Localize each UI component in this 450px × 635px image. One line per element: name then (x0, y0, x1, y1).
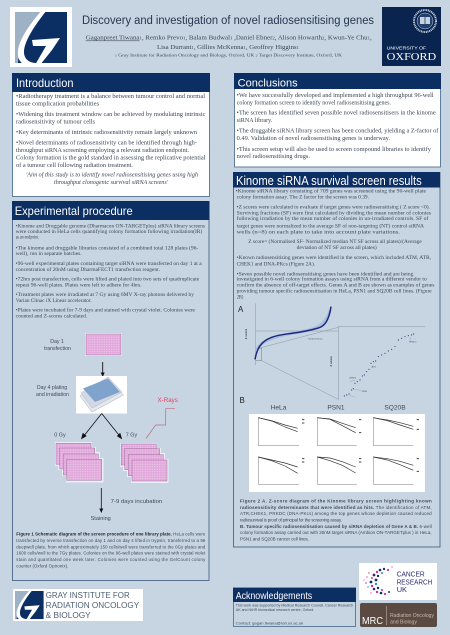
label: 7 Gy: 7 Gy (126, 433, 137, 439)
text: kinome bullets: following irradiation by the mean number of colonies in un-irradiated controls. SF of (237, 215, 429, 222)
logo: Gray Institute banner (13, 589, 143, 621)
logo: MRC Radiation Oncology and Biology: MRC (362, 616, 383, 627)
arrow: incubation (99, 488, 103, 513)
label: 0 Gy: 0 Gy (54, 433, 66, 439)
icon: dotted C (363, 566, 393, 595)
chart: Z-score curve with inset: PRKDC (409, 342, 417, 344)
label: staining: Staining (91, 516, 111, 522)
icon: plate in white box (76, 376, 127, 414)
label: PSN1: PSN1 (327, 404, 345, 412)
heading: experimental procedure: Experimental procedure (15, 204, 133, 218)
plates: 7 Gy stack (120, 443, 168, 483)
authors: Gaganpreet Tiwana 1, Remko Prevo 1, Balam Budwal 1 ,Daniel Ebner 2, Alison Howarth 2, Kwun-Ye Chu 1, (86, 36, 372, 42)
text: kinome bullets: confirm the absence of off-target effects. Genes A and B are shown as examples of genes (237, 282, 434, 289)
text: kinome bullets: Z score= (Normalised SF- Normalized median NT SF across all plates)/(Average (248, 238, 422, 245)
logo: Gray Institute banner: RADIATION ONCOLOGY (46, 601, 140, 610)
text: kinome bullets: •Seven possible novel radiosensitising genes have been identified and are being (237, 270, 414, 277)
label: day 4 plating and irradiation: and irradiation (36, 392, 69, 398)
figure 1 caption: 1600 cells/well to the 7Gy plates. Colonies on the 96-well plates were stained with crystal violet (16, 551, 206, 556)
text: funding and contact: Contact: gagan.tiwana@rob.ox.ac.uk (236, 620, 303, 626)
text: procedure bullets: well), run in separate batches. (16, 250, 82, 257)
logo: Cancer Research UK: CANCER (397, 570, 425, 579)
chart: Z-score curve with inset (244, 303, 425, 400)
text: procedure bullets: were conducted in HeLa cells quantifying colony formation following irradiation(IR) (16, 228, 202, 235)
heading: introduction: Introduction (16, 76, 74, 90)
label: day 4 plating and irradiation (36, 385, 69, 398)
text: introduction bullets: throughput siRNA screening employing a relevant radiation endpoint. (16, 147, 189, 154)
text: introduction bullets: of a tumour cell following radiation treatment. (16, 162, 133, 169)
text: procedure bullets: concentration of 20nM using DharmaFECT1 transfection reagent. (16, 266, 160, 273)
text: conclusions bullets: •This screen setup will also be used to screen compound libraries to identify (237, 146, 431, 153)
text: kinome bullets: •Known radiosensitising genes were identified in the screen, which included ATM, ATR, (237, 254, 431, 261)
logo: University of Oxford (382, 7, 441, 66)
text: kinome bullets: deviation of NT SF across all plates) (297, 244, 377, 251)
logo: University of Oxford: UNIVERSITY OF (387, 46, 427, 50)
text: kinome bullets (236, 187, 434, 300)
text: introduction bullets (16, 93, 206, 186)
text: kinome bullets: Surviving fractions (SF) were first calculated by dividing the mean number of colonies (237, 209, 431, 216)
text: procedure bullets (16, 222, 205, 320)
panel: conclusions (234, 73, 441, 167)
text: introduction bullets: radiosensitivity of tumour cells (16, 119, 95, 126)
chart: SQ20B gene B (373, 457, 419, 484)
text: conclusions bullets: siRNA library. (237, 118, 273, 124)
figure 2 caption: colony formation assay carried out with 20nM target siRNA (Ambion ON-TARGETplus ) in HeLa, (240, 530, 432, 535)
text: procedure bullets: •72hrs post transfection, cells were lifted and plated into two sets of quadruplicate (16, 276, 200, 283)
chart: Z-score curve with inset: Z score (329, 356, 333, 367)
logo: Gray Institute banner: & BIOLOGY (46, 611, 91, 620)
text: kinome bullets: target genes were normalized to the average SF of non-targeting (NT) control siRNA (237, 222, 424, 229)
label: SQ20B: SQ20B (384, 404, 406, 412)
heading: conclusions: Conclusions (238, 77, 298, 89)
figure 2 caption: radiosensitivity determinants that were identified as hits. The identification of ATM, (240, 505, 432, 510)
icon: x-ray zigzag (146, 409, 175, 438)
text: procedure bullets: as an endpoint. (16, 235, 39, 241)
figure 2 caption: radiosurvival is proof of principal for the screening assay. (240, 517, 342, 522)
text: kinome bullets: investigated in 6-well colony formation assays using siRNA from a different vendor to (237, 276, 427, 283)
figure 1 caption: counter (Oxford Optronix). (16, 563, 68, 568)
title: Discovery and investigation of novel radiosensitising genes (82, 15, 374, 27)
logo: Gray Institute banner: GRAY INSTITUTE FOR (46, 591, 130, 600)
figure 2 caption: Figure 2 A. Z-score diagram of the Kinome library screen highlighting known (240, 498, 432, 503)
chart: PSN1 gene A (317, 417, 361, 446)
chart: Z-score curve with inset: CHEK1 (349, 378, 357, 380)
label: HeLa: HeLa (271, 404, 287, 412)
text: funding and contact (236, 602, 353, 626)
heading: kinome results: Kinome siRNA survival screen results (236, 173, 422, 188)
text: procedure bullets: counted and Z-scores calculated. (16, 314, 87, 320)
arrows: split to 0 Gy and 7 Gy (82, 414, 122, 438)
figure 2 caption: B. Tumour specific radiosensitisation caused by siRNA depletion of Gene A & B. 6-well (240, 524, 432, 529)
label: day 4 plating and irradiation: Day 4 plating (37, 385, 67, 391)
label: day 1 transfection: Day 1 (50, 339, 64, 345)
figure 2 caption: PSN1 and SQ20B cancer cell lines. (240, 536, 309, 541)
text: funding and contact: This work was supported by Medical Research Council, Cancer Research (236, 602, 353, 608)
text: kinome bullets: providing tumour specific radiosensitisation in HeLa, PSN1 and SQ20B cell lines. (Figure (237, 287, 432, 294)
text: conclusions bullets: colony formation screen to identify novel radiosensitising genes. (237, 99, 391, 106)
logo: Gray Institute G (10, 7, 72, 67)
text: conclusions bullets: •We have successfully developed and implemented a high throughput 96-well (237, 92, 434, 99)
text: introduction bullets: •Radiotherapy treatment is a balance between tumour control and normal (16, 93, 205, 100)
text: introduction bullets: Colony formation is the gold standard in assessing the replicative potential (16, 155, 206, 162)
heading: acknowledgements: Acknowledgements (236, 590, 312, 602)
chart: Z-score curve with inset: Ranked Genes (308, 338, 323, 340)
text: conclusions bullets: •The druggable siRNA library screen has been concluded, yielding a Z-factor of (237, 128, 438, 135)
logo: Cancer Research UK: RESEARCH (397, 577, 432, 586)
figure 1 caption: stain and quantitated one week later. Colonies were counted using the GelCount colony (16, 557, 206, 562)
label: B: B (240, 396, 245, 405)
label: A: A (238, 305, 244, 314)
figure 1 caption: transfected by reverse transfection on day 1 and on day 4 lifted in trypsin, transferred to a 96 (16, 538, 206, 543)
authors: Lisa Durrant 1, Gillies McKenna 1, Geoffrey Higgins 1 (157, 44, 299, 51)
logo: MRC Radiation Oncology and Biology: Radiation Oncology (390, 613, 434, 619)
authors (86, 36, 372, 58)
logo: MRC Radiation Oncology and Biology (360, 603, 437, 627)
figure 1 caption: deepwell plate, from which approximately 150 cells/well were transferred to the 0Gy plates and (16, 544, 206, 549)
panel: experimental procedure (12, 201, 210, 580)
chart: Z-score curve with inset: Z score (244, 328, 248, 339)
chart: Z-score curve with inset: ATM (362, 390, 367, 393)
text: procedure bullets: •Plates were incubated for 7-9 days and stained with crystal violet. Colonies were (16, 307, 196, 314)
figure 1 caption: Figure 1 Schematic diagram of the screen procedure of one library plate. HeLa cells were (16, 532, 206, 537)
text: procedure bullets: Varian Clinac iX Linear accelerator. (16, 298, 92, 304)
text: kinome bullets: CHEK1 and DNA-PKcs (Figure 2A). (237, 260, 315, 267)
panel: introduction (12, 73, 210, 196)
charts: survival curves (249, 414, 425, 492)
label: day 1 transfection: transfection (44, 346, 71, 352)
plates: 0 Gy stack (55, 442, 104, 482)
label: incubation: 7-9 days incubation (111, 499, 162, 505)
logo: Cancer Research UK: UK (397, 585, 407, 594)
text: introduction bullets: throughput clonogenic survival siRNA screens' (54, 179, 169, 186)
text: kinome bullets: 2B) (237, 293, 244, 300)
panel: kinome siRNA survival screen results (233, 172, 440, 547)
text: conclusions bullets: 0.49. Validation of novel radiosensitising genes is underway. (237, 135, 391, 142)
text: procedure bullets: •Kinome and Druggable genome (Dharmacon ON-TARGETplus) siRNA library screens (16, 222, 205, 229)
logo: University of Oxford: OXFORD (387, 52, 437, 63)
logo: MRC Radiation Oncology and Biology: and Biology (390, 620, 417, 626)
arrow: transfection to plating (101, 362, 105, 377)
text: procedure bullets: •Treatment plates were irradiated at 7 Gy using 6MV X-ray photons delivered by (16, 292, 194, 298)
text: kinome bullets: wells (n=8) on each plate to take into account plate variations. (237, 228, 400, 235)
text: conclusions bullets (237, 92, 438, 160)
panel: acknowledgements (233, 588, 356, 626)
text: procedure bullets: repeat 96-well plates. Plates were left to adhere for 4hrs. (16, 282, 142, 289)
chart: PSN1 gene B (317, 457, 361, 484)
text: conclusions bullets: •The screen has identified seven possible novel radiosensitisers in the kinome (237, 110, 436, 117)
figure 2 caption (240, 498, 432, 541)
text: introduction bullets: •Widening this treatment window can be achieved by modulating intrinsic (16, 111, 206, 118)
text: procedure bullets: •96-well experimental plates containing target siRNA were transfected on day 1 at a (16, 260, 202, 267)
chart: HeLa gene A (258, 417, 304, 446)
logo: Cancer Research UK (359, 563, 437, 600)
figure 2 caption: ATR,CHEK1, PRKDC (DNA-PKcs) among the top genes whose depletion caused reduced (240, 511, 432, 516)
chart: Z-score curve with inset: ATR (372, 366, 376, 369)
chart: HeLa gene B (258, 457, 304, 484)
label: X-Rays: X-Rays (158, 397, 178, 404)
chart: SQ20B gene A (373, 417, 419, 446)
text: conclusions bullets: novel radiosensitising drugs. (237, 154, 311, 160)
text: kinome bullets: •Z scores were calculated to evaluate if target genes were radiosensitising ( Z score <0). (237, 204, 430, 211)
icon: 96-well plate day 1 (85, 333, 122, 356)
text: kinome bullets: colony formation assay. The Z factor for the screen was 0.39. (237, 193, 369, 200)
text: introduction bullets: 'Aim of this study is to identify novel radiosensitising genes using high (26, 172, 198, 179)
authors: 1 Gray Institute for Radiation Oncology and Biology, Oxford, UK 2 Target Discovery Institute, Oxford, UK (115, 52, 342, 58)
text: kinome bullets: •Kinome siRNA library consisting of 709 genes was screened using the 96-well plate (236, 187, 427, 194)
label: day 1 transfection (44, 339, 71, 352)
text: funding and contact: UK and NIHR biomedical research centre, Oxford. (236, 607, 314, 612)
figure 1 caption (16, 532, 206, 568)
text: introduction bullets: tissue complication probabilities (16, 101, 99, 108)
text: introduction bullets: •Key determinants of intrinsic radiosensitivity remain largely unknown (16, 129, 198, 136)
text: procedure bullets: •The kinome and druggable libraries consisted of a combined total 128 plates (96- (16, 244, 198, 251)
text: introduction bullets: •Novel determinants of radiosensitivity can be identified through high- (16, 140, 197, 147)
